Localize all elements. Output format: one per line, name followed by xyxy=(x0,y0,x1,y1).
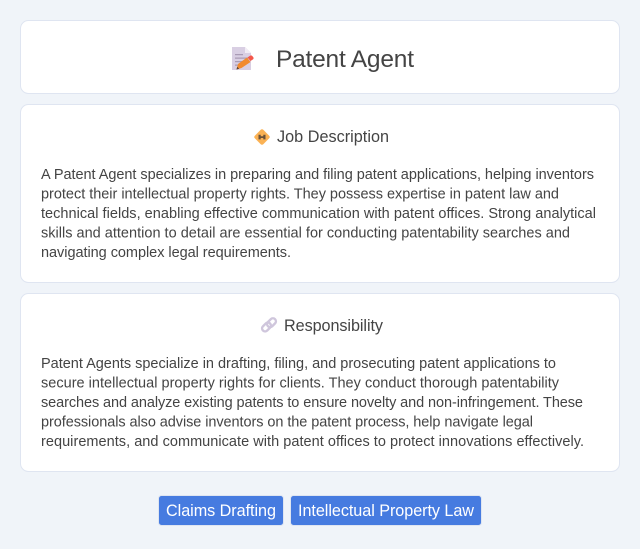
text block: responsibility xyxy=(41,356,584,450)
panel: responsibility xyxy=(20,294,620,472)
heading: responsibility: Responsibility xyxy=(284,317,384,335)
panel: job description xyxy=(20,104,620,282)
icon: link xyxy=(261,317,277,333)
icon: memo with pencil xyxy=(232,47,254,70)
text block: job description: protect their intellectual property rights. They possess expertise in patent law and xyxy=(41,186,559,202)
panel: title xyxy=(20,20,620,94)
text block: responsibility: professionals also advise inventors on the patent process, help navigate legal xyxy=(41,414,533,430)
tag: intellectual property law xyxy=(290,496,482,526)
text block: job description: skills and attention to detail are essential for conducting patentability searches and xyxy=(41,226,570,242)
tag: intellectual property law: Intellectual Property Law xyxy=(298,502,474,520)
icon: orange diamond xyxy=(254,129,270,145)
text block: job description: navigating complex legal requirements. xyxy=(41,245,291,261)
tag: claims drafting: Claims Drafting xyxy=(166,502,276,520)
title text: Patent Agent xyxy=(276,46,414,73)
heading: job description: Job Description xyxy=(277,128,389,146)
text block: responsibility: secure intellectual property rights for clients. They conduct thorough patentability xyxy=(41,376,560,392)
text block: job description: technical fields, enabling effective communication with patent offices. Strong analytical xyxy=(41,206,596,222)
text block: job description: A Patent Agent specializes in preparing and filing patent applications, helping inventors xyxy=(41,167,594,183)
text block: responsibility: requirements, and communicate with patent offices to protect innovations effectively. xyxy=(41,434,584,450)
text block: responsibility: Patent Agents specialize in drafting, filing, and prosecuting patent applications to xyxy=(41,356,556,372)
text block: responsibility: searches and analyze existing patents to ensure novelty and non-infringement. These xyxy=(41,395,583,411)
tag: claims drafting xyxy=(158,496,284,526)
text block: job description xyxy=(41,167,596,261)
